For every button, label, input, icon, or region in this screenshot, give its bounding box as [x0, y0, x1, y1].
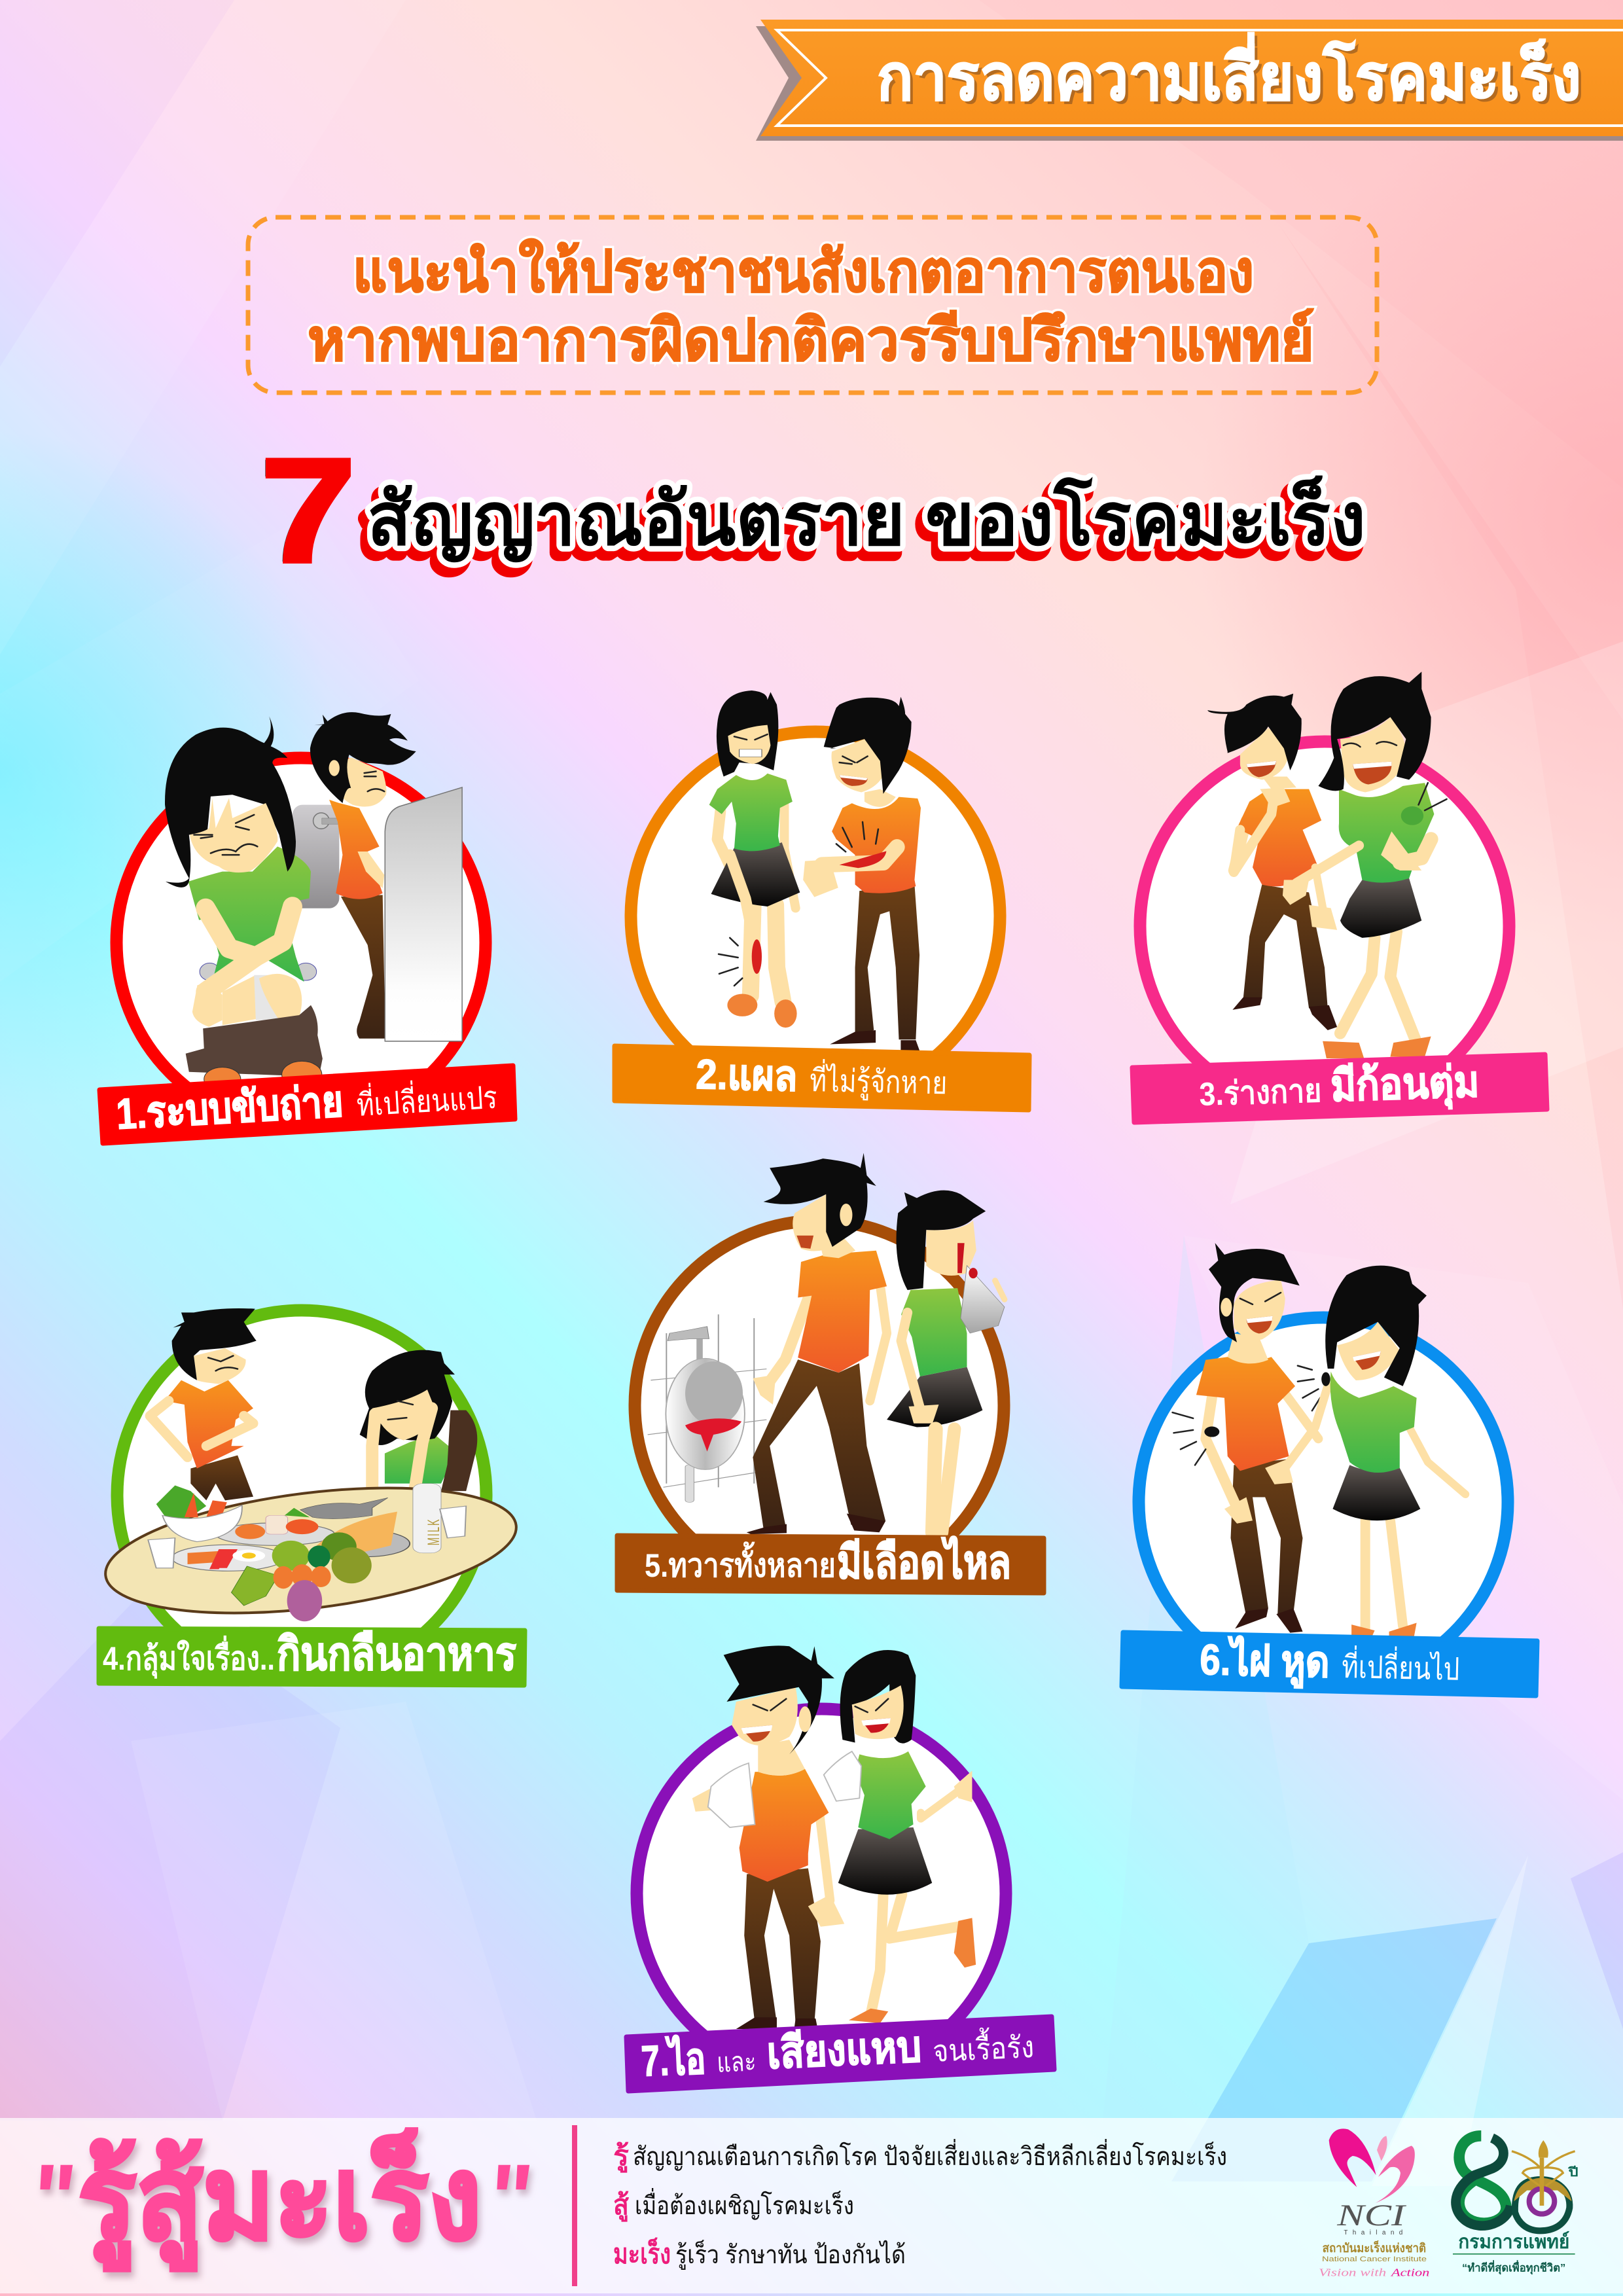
- label: item 2: [615, 1046, 1029, 1110]
- slogan: รู้สู้มะเร็ง: [78, 2128, 482, 2271]
- heading: 7 warning signs: 7: [258, 427, 353, 593]
- logo: Department of Medical Services 80 years: กรมการแพทย์: [1458, 2231, 1569, 2253]
- panel: 1 excretion: [99, 712, 515, 1143]
- heading: 7 warning signs: สัญญาณอันตราย ของโรคมะเร็ง: [367, 475, 1366, 563]
- text: slogan explanation: เมื่อต้องเผชิญโรคมะเร็ง: [635, 2188, 854, 2220]
- label: item 2: ที่ไม่รู้จักหาย: [810, 1058, 948, 1102]
- logo: Department of Medical Services 80 years: ปี: [1567, 2165, 1578, 2179]
- banner: title ribbon: การลดความเสี่ยงโรคมะเร็ง: [877, 32, 1581, 113]
- label: item 4: 4.กลุ้มใจเรื่อง..: [103, 1636, 275, 1679]
- slogan: ": [483, 2144, 538, 2253]
- label: item 5: [617, 1535, 1044, 1593]
- label: item 3: [1132, 1054, 1547, 1122]
- illustration: woman and man with wounds: [709, 691, 921, 1050]
- logo: National Cancer Institute: National Cancer Institute: [1322, 2255, 1427, 2263]
- banner: title ribbon: [756, 20, 1623, 141]
- label: item 1: [99, 1066, 515, 1143]
- label: item 7: 7.ไอ: [640, 2034, 707, 2085]
- label: item 7: และ: [716, 2045, 757, 2078]
- illustration: urinal, man and woman with nosebleed: [648, 1153, 1005, 1534]
- banner: title ribbon: การลดความเสี่ยงโรคมะเร็ง: [880, 35, 1584, 117]
- text: slogan explanation: รู้เร็ว รักษาทัน ป้องกันได้: [675, 2239, 906, 2270]
- logo: National Cancer Institute: NCI: [1336, 2198, 1407, 2233]
- label: item 2: 2.แผล: [696, 1050, 798, 1100]
- label: item 4: [99, 1628, 525, 1685]
- panel: 6 moles: [1122, 1243, 1537, 1696]
- logo: Department of Medical Services 80 years: “ทำดีที่สุดเพื่อทุกชีวิต”: [1462, 2260, 1565, 2275]
- label: item 7: จนเรื้อรัง: [932, 2025, 1035, 2068]
- callout: dashed advice box: แนะนำให้ประชาชนสังเกตอาการตนเอง: [353, 238, 1254, 304]
- text: slogan explanation: มะเร็ง: [613, 2237, 671, 2269]
- panel: 7 cough: [626, 1645, 1054, 2091]
- label: item 4: กินกลืนอาหาร: [277, 1628, 516, 1679]
- logo: National Cancer Institute: Thailand: [1344, 2229, 1402, 2236]
- label: item 1: ที่เปลี่ยนแปร: [355, 1075, 498, 1123]
- callout: dashed advice box: [248, 217, 1377, 393]
- panel: 4 digestion: MILK: [425, 1519, 443, 1545]
- logo: National Cancer Institute: [1319, 2128, 1429, 2278]
- label: item 1: 1.ระบบขับถ่าย: [115, 1077, 344, 1138]
- text: slogan explanation: [613, 2139, 1227, 2270]
- label: item 6: [1122, 1632, 1537, 1696]
- callout: dashed advice box: หากพบอาการผิดปกติควรรีบปรึกษาแพทย์: [308, 308, 1314, 372]
- label: item 5: มีเลือดไหล: [837, 1535, 1011, 1588]
- panel: 5 bleeding: [617, 1153, 1044, 1593]
- footer band: [0, 2118, 1623, 2293]
- label: item 3: 3.ร่างกาย: [1199, 1072, 1322, 1113]
- illustration: man and woman with moles: [1173, 1243, 1465, 1638]
- illustration: toilet and two people: [165, 712, 462, 1091]
- text: slogan explanation: รู้: [613, 2140, 629, 2173]
- logo: National Cancer Institute: สถาบันมะเร็งแห่งชาติ: [1323, 2240, 1426, 2255]
- logo: Department of Medical Services 80 years: [1453, 2136, 1578, 2275]
- heading: 7 warning signs: [258, 427, 1366, 593]
- illustration: man and woman coughing: [692, 1645, 976, 2029]
- label: item 7: [626, 2017, 1054, 2091]
- logo: National Cancer Institute: Vision with: [1319, 2266, 1386, 2278]
- heading: 7 warning signs: สัญญาณอันตราย ของโรคมะเร็ง: [362, 483, 1361, 571]
- panel: 4 digestion: [99, 1308, 525, 1685]
- heading: 7 warning signs: 7: [260, 427, 356, 593]
- text: slogan explanation: สัญญาณเตือนการเกิดโรค ปัจจัยเสี่ยงและวิธีหลีกเลี่ยงโรคมะเร็ง: [633, 2139, 1227, 2171]
- illustration: people and food table: [150, 1308, 477, 1502]
- label: item 3: มีก้อนตุ่ม: [1330, 1057, 1480, 1113]
- panel: 3 lump: [1132, 672, 1547, 1122]
- callout: dashed advice box: แนะนำให้ประชาชนสังเกตอาการตนเอง: [353, 238, 1254, 304]
- callout: dashed advice box: หากพบอาการผิดปกติควรรีบปรึกษาแพทย์: [308, 308, 1314, 372]
- panel: 2 wounds: [615, 691, 1029, 1110]
- label: item 7: เสียงแหบ: [766, 2022, 922, 2077]
- label: item 5: 5.ทวารทั้งหลาย: [645, 1541, 836, 1584]
- illustration: man and woman with lumps: [1207, 672, 1447, 1058]
- label: item 6: 6.ไฝ หูด: [1200, 1634, 1330, 1689]
- slogan: ": [26, 2144, 81, 2253]
- text: slogan explanation: สู้: [613, 2189, 629, 2222]
- logo: National Cancer Institute: Action: [1391, 2266, 1429, 2278]
- label: item 6: ที่เปลี่ยนไป: [1342, 1645, 1460, 1687]
